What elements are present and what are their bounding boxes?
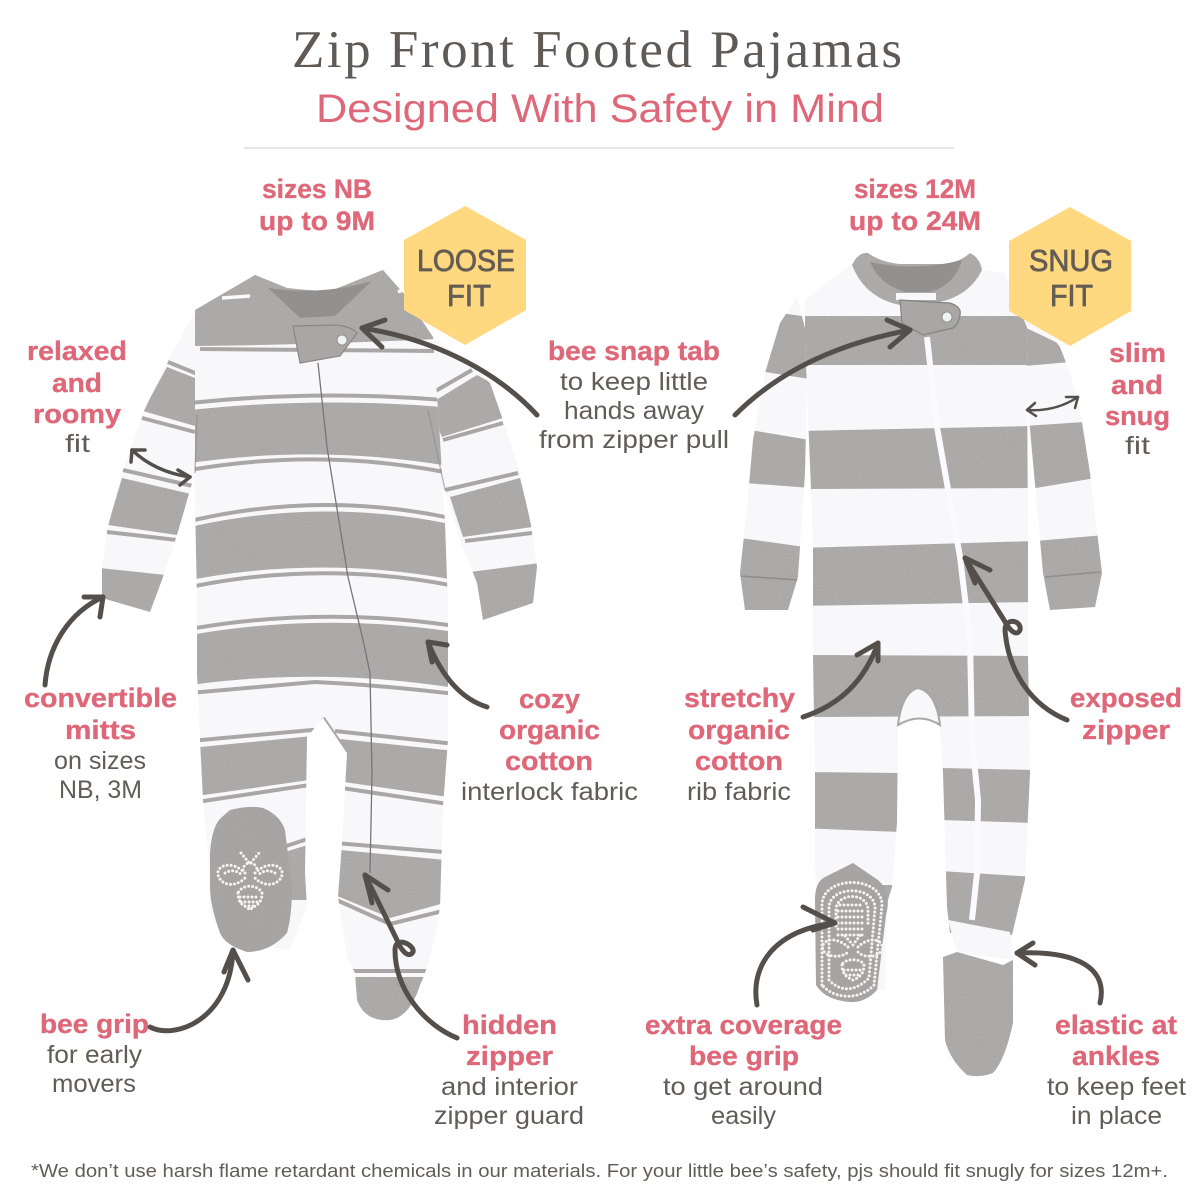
arrow: stretchy cotton bbox=[803, 643, 878, 717]
label: extra coverage bee grip: bee grip bbox=[689, 1041, 799, 1071]
badge: loose fit: FIT bbox=[447, 278, 491, 313]
foot bbox=[943, 952, 1013, 1076]
label: hidden zipper bbox=[434, 1010, 584, 1130]
label: sizes NB bbox=[259, 174, 375, 236]
label: sizes NB: sizes NB bbox=[262, 174, 372, 204]
collar and neck opening bbox=[255, 270, 383, 320]
label: relaxed and roomy: roomy bbox=[33, 399, 121, 429]
bee snap tab bbox=[900, 300, 960, 335]
gusset bbox=[898, 688, 940, 725]
collar bbox=[852, 253, 982, 305]
badge: snug fit: FIT bbox=[1050, 278, 1093, 313]
label: elastic at ankles bbox=[1047, 1010, 1186, 1130]
label: elastic at ankles: to keep feet bbox=[1047, 1073, 1186, 1101]
arrow: cozy cotton bbox=[428, 642, 487, 707]
label: stretchy organic cotton: organic bbox=[688, 715, 790, 745]
snug pajama body with stripes bbox=[805, 316, 1030, 935]
label: relaxed and roomy: relaxed bbox=[27, 336, 127, 366]
label: hidden zipper: zipper guard bbox=[434, 1102, 584, 1130]
right sleeve of loose pajamas bbox=[436, 368, 537, 620]
label: cozy organic cotton bbox=[461, 684, 638, 806]
right sleeve of snug pajamas bbox=[1027, 328, 1102, 610]
label: exposed zipper: zipper bbox=[1082, 715, 1171, 745]
label: hidden zipper: hidden bbox=[462, 1010, 557, 1040]
sleeve seams bbox=[195, 410, 445, 490]
label: cozy organic cotton: organic bbox=[499, 715, 600, 745]
left sleeve of loose pajamas bbox=[102, 360, 195, 612]
arrow: slim fit bbox=[1027, 397, 1078, 416]
panel: loose fit pajamas bbox=[95, 262, 545, 1030]
label: stretchy organic cotton: cotton bbox=[695, 746, 783, 776]
arrow: hidden zipper bbox=[365, 875, 457, 1038]
arrow: bee grip bbox=[150, 950, 248, 1031]
label: stretchy organic cotton bbox=[684, 683, 795, 806]
label: relaxed and roomy: fit bbox=[65, 430, 90, 458]
badge: loose fit: LOOSE bbox=[417, 243, 515, 278]
label: hidden zipper: zipper bbox=[466, 1041, 554, 1071]
label: extra coverage bee grip: easily bbox=[711, 1102, 777, 1130]
badge: loose fit bbox=[404, 206, 526, 345]
label: slim and snug: and bbox=[1111, 370, 1163, 400]
label: elastic at ankles: in place bbox=[1071, 1102, 1162, 1130]
label: exposed zipper bbox=[1070, 683, 1182, 745]
bee grip sole bbox=[210, 807, 292, 952]
label: convertible mitts bbox=[24, 683, 177, 804]
label: extra coverage bee grip: extra coverage bbox=[645, 1010, 842, 1040]
label: cozy organic cotton: cotton bbox=[505, 746, 593, 776]
label: bee grip: for early bbox=[47, 1041, 143, 1069]
label: stretchy organic cotton: stretchy bbox=[684, 683, 795, 713]
label: bee snap tab: hands away bbox=[564, 397, 705, 425]
arrow: exposed zipper bbox=[965, 558, 1067, 720]
arrow: relaxed fit bbox=[131, 450, 190, 485]
badge: snug fit bbox=[1009, 207, 1131, 346]
arrow: elastic ankles bbox=[1017, 943, 1101, 1003]
label: elastic at ankles: ankles bbox=[1072, 1041, 1160, 1071]
label: sizes 12M bbox=[849, 174, 981, 236]
label: slim and snug: snug bbox=[1105, 401, 1170, 431]
label: slim and snug: slim bbox=[1109, 338, 1166, 368]
label: bee grip bbox=[40, 1009, 149, 1098]
label: slim and snug: fit bbox=[1125, 432, 1150, 460]
arrow: bee snap tab right bbox=[735, 320, 910, 415]
label: bee snap tab: from zipper pull bbox=[539, 426, 729, 454]
label: cozy organic cotton: interlock fabric bbox=[461, 778, 638, 806]
arrow: extra coverage bbox=[756, 907, 835, 1005]
bee snap tab bbox=[293, 325, 357, 363]
label: exposed zipper: exposed bbox=[1070, 683, 1182, 713]
badge: snug fit: SNUG bbox=[1029, 243, 1113, 278]
label: bee grip: movers bbox=[52, 1070, 136, 1098]
loose pajama body with stripes bbox=[190, 262, 455, 1030]
label: stretchy organic cotton: rib fabric bbox=[687, 778, 791, 806]
extra coverage grip sole bbox=[815, 863, 888, 1002]
label: convertible mitts: mitts bbox=[65, 715, 136, 745]
ankle band bbox=[948, 920, 1013, 960]
label: elastic at ankles: elastic at bbox=[1055, 1010, 1177, 1040]
label: bee snap tab: bee snap tab bbox=[548, 336, 720, 366]
label: sizes NB: up to 9M bbox=[259, 206, 375, 236]
title: Zip Front Footed Pajamas bbox=[292, 21, 902, 79]
footnote: *We don’t use harsh flame retardant chemicals in our materials. For your little bee’s safety, pjs should fit snugly for sizes 12m+. bbox=[31, 1161, 1168, 1181]
bee motif bbox=[218, 853, 282, 910]
label: sizes 12M: sizes 12M bbox=[854, 174, 976, 204]
subtitle: Designed With Safety in Mind bbox=[316, 87, 884, 131]
label: extra coverage bee grip: to get around bbox=[663, 1073, 823, 1101]
label: bee grip: bee grip bbox=[40, 1009, 149, 1039]
panel: snug fit pajamas bbox=[735, 253, 1105, 1076]
label: convertible mitts: NB, 3M bbox=[59, 776, 142, 804]
label: convertible mitts: convertible bbox=[24, 683, 177, 713]
label: relaxed and roomy bbox=[27, 336, 127, 458]
label: cozy organic cotton: cozy bbox=[519, 684, 580, 714]
label: bee snap tab: to keep little bbox=[560, 368, 708, 396]
label: relaxed and roomy: and bbox=[52, 368, 102, 398]
label: bee snap tab bbox=[539, 336, 729, 454]
label: sizes 12M: up to 24M bbox=[849, 206, 981, 236]
zipper line bbox=[318, 363, 372, 873]
arrow: convertible mitts bbox=[45, 597, 103, 685]
label: hidden zipper: and interior bbox=[441, 1073, 578, 1101]
grip dots bbox=[822, 882, 882, 996]
label: extra coverage bee grip bbox=[645, 1010, 842, 1130]
label: slim and snug bbox=[1105, 338, 1170, 460]
arrow: bee snap tab left bbox=[362, 320, 537, 415]
label: convertible mitts: on sizes bbox=[54, 747, 146, 775]
left sleeve of snug pajamas bbox=[740, 314, 806, 610]
exposed zipper bbox=[927, 337, 978, 920]
